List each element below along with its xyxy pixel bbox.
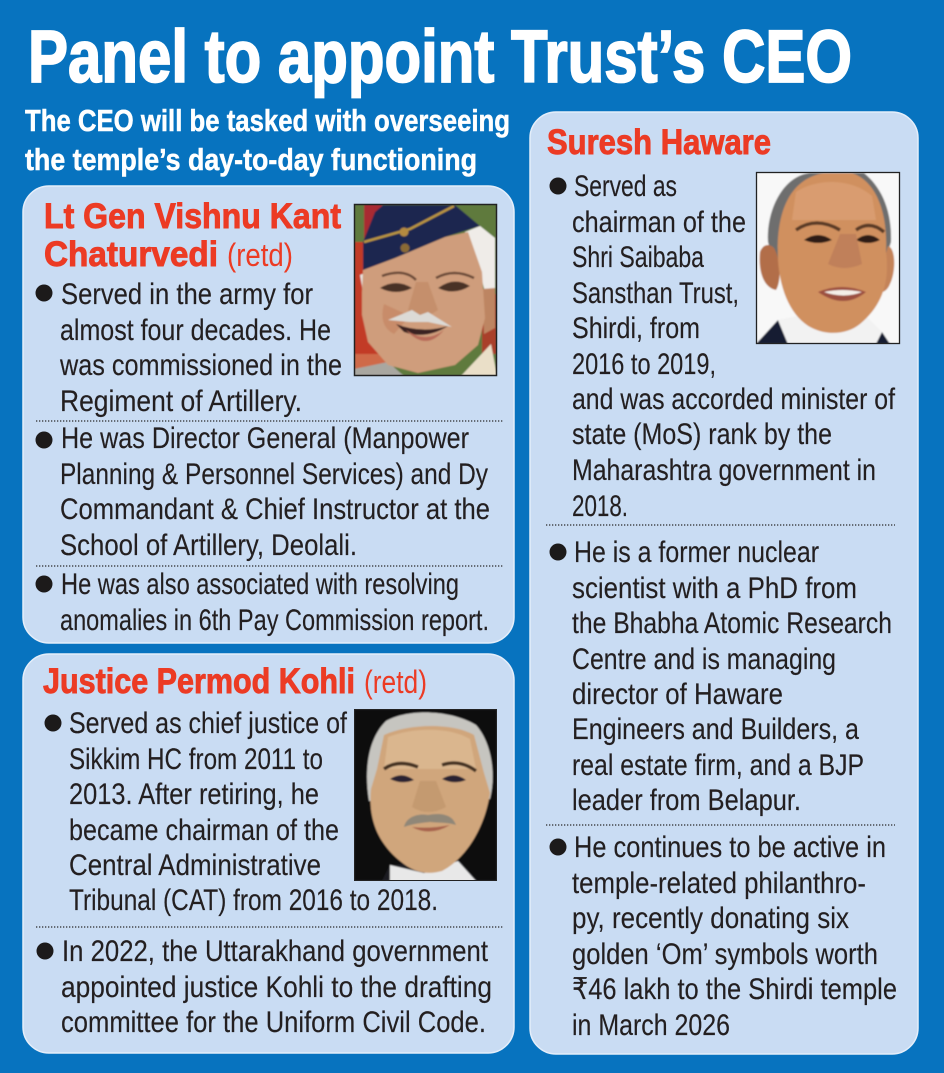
bullet 2: Uniform Civil Code: appointed justice Kohli to the drafting bbox=[61, 971, 492, 1004]
bullet 2: nuclear scientist: Centre and is managing bbox=[572, 643, 836, 676]
bullet 1: chief justice: Tribunal (CAT) from 2016 to 2018. bbox=[69, 884, 438, 917]
bullet 2: Uniform Civil Code: committee for the Uniform Civil Code. bbox=[61, 1006, 486, 1039]
heading: Chaturvedi name: Chaturvedi bbox=[44, 235, 218, 274]
bullet 1: chief justice: became chairman of the bbox=[69, 814, 339, 847]
bullet 3: philanthropy: He continues to be active in bbox=[574, 831, 886, 864]
bullet 2: nuclear scientist: director of Haware bbox=[572, 678, 783, 711]
heading: Kohli name: Justice Permod Kohli bbox=[43, 662, 355, 701]
bullet 2: nuclear scientist: scientist with a PhD from bbox=[572, 572, 857, 605]
bullet 2: Uniform Civil Code bbox=[36, 935, 492, 1039]
bullet 1: chief justice bbox=[44, 707, 438, 917]
bullet 1: chief justice: 2013. After retiring, he bbox=[69, 778, 319, 811]
heading: Haware name: Suresh Haware bbox=[547, 123, 771, 162]
heading: Chaturvedi name bbox=[44, 197, 341, 274]
bullet 2: Director General bbox=[36, 422, 490, 562]
bullet 1: Shirdi trust chairman: state (MoS) rank by the bbox=[572, 418, 832, 451]
bullet 2: Director General: Planning & Personnel Services) and Dy bbox=[60, 458, 488, 491]
subtitle: the temple’s day-to-day functioning bbox=[25, 142, 477, 177]
bullet 3: philanthropy: ₹46 lakh to the Shirdi temple bbox=[572, 973, 897, 1006]
bullet 2: nuclear scientist: leader from Belapur. bbox=[572, 784, 801, 817]
bullet 3: philanthropy bbox=[550, 831, 897, 1042]
bullet 3: Pay Commission bbox=[36, 568, 489, 637]
bullet 3: philanthropy: in March 2026 bbox=[572, 1009, 730, 1042]
panel: Suresh Haware bbox=[530, 112, 918, 1054]
bullet 2: nuclear scientist bbox=[550, 536, 892, 817]
bullet 3: Pay Commission: anomalies in 6th Pay Commission report. bbox=[60, 604, 489, 637]
bullet 2: Director General: School of Artillery, Deolali. bbox=[60, 529, 357, 562]
bullet 1: army service bbox=[36, 278, 342, 418]
bullet 1: Shirdi trust chairman: Shirdi, from bbox=[572, 312, 700, 345]
bullet 1: Shirdi trust chairman: chairman of the bbox=[572, 206, 746, 239]
panel: Justice Permod Kohli bbox=[23, 654, 514, 1053]
photo: Kohli portrait bbox=[354, 709, 497, 881]
subtitle bbox=[25, 103, 510, 177]
bullet 2: Uniform Civil Code: In 2022, the Uttarakhand government bbox=[62, 935, 489, 968]
bullet 1: army service: Served in the army for bbox=[61, 278, 313, 311]
bullet 3: philanthropy: py, recently donating six bbox=[572, 902, 849, 935]
bullet 2: nuclear scientist: He is a former nuclear bbox=[574, 536, 819, 569]
bullet 2: Director General: He was Director General (Manpower bbox=[61, 422, 469, 455]
bullet 2: Director General: Commandant & Chief Instructor at the bbox=[60, 493, 490, 526]
heading: Chaturvedi name: Lt Gen Vishnu Kant bbox=[44, 197, 341, 236]
bullet 1: Shirdi trust chairman: 2016 to 2019, bbox=[572, 348, 716, 381]
bullet 1: army service: Regiment of Artillery. bbox=[60, 385, 302, 418]
heading: Kohli name: (retd) bbox=[364, 664, 427, 700]
bullet 1: army service: was commissioned in the bbox=[59, 349, 342, 382]
bullet 2: nuclear scientist: Engineers and Builders, a bbox=[572, 713, 859, 746]
bullet 1: Shirdi trust chairman: Shri Saibaba bbox=[572, 241, 704, 274]
bullet 1: chief justice: Served as chief justice of bbox=[69, 707, 348, 740]
photo: Haware portrait bbox=[756, 172, 900, 344]
bullet 1: Shirdi trust chairman: Sansthan Trust, bbox=[572, 277, 739, 310]
bullet 3: philanthropy: golden ‘Om’ symbols worth bbox=[572, 938, 878, 971]
bullet 1: chief justice: Sikkim HC from 2011 to bbox=[69, 743, 323, 776]
bullet 3: Pay Commission: He was also associated with resolving bbox=[61, 568, 459, 601]
bullet 1: Shirdi trust chairman: Served as bbox=[574, 170, 677, 203]
subtitle: The CEO will be tasked with overseeing bbox=[25, 103, 510, 138]
bullet 1: army service: almost four decades. He bbox=[60, 314, 331, 347]
bullet 2: nuclear scientist: real estate firm, and a BJP bbox=[572, 749, 864, 782]
bullet 1: Shirdi trust chairman bbox=[550, 170, 896, 523]
bullet 1: Shirdi trust chairman: 2018. bbox=[572, 490, 628, 523]
photo: Chaturvedi portrait bbox=[354, 204, 497, 376]
heading: Chaturvedi name: (retd) bbox=[227, 237, 293, 273]
panel: Lt Gen Vishnu Kant Chaturvedi bbox=[23, 186, 514, 643]
bullet 1: chief justice: Central Administrative bbox=[69, 849, 321, 882]
bullet 3: philanthropy: temple-related philanthro- bbox=[572, 867, 866, 900]
bullet 1: Shirdi trust chairman: Maharashtra government in bbox=[572, 454, 876, 487]
